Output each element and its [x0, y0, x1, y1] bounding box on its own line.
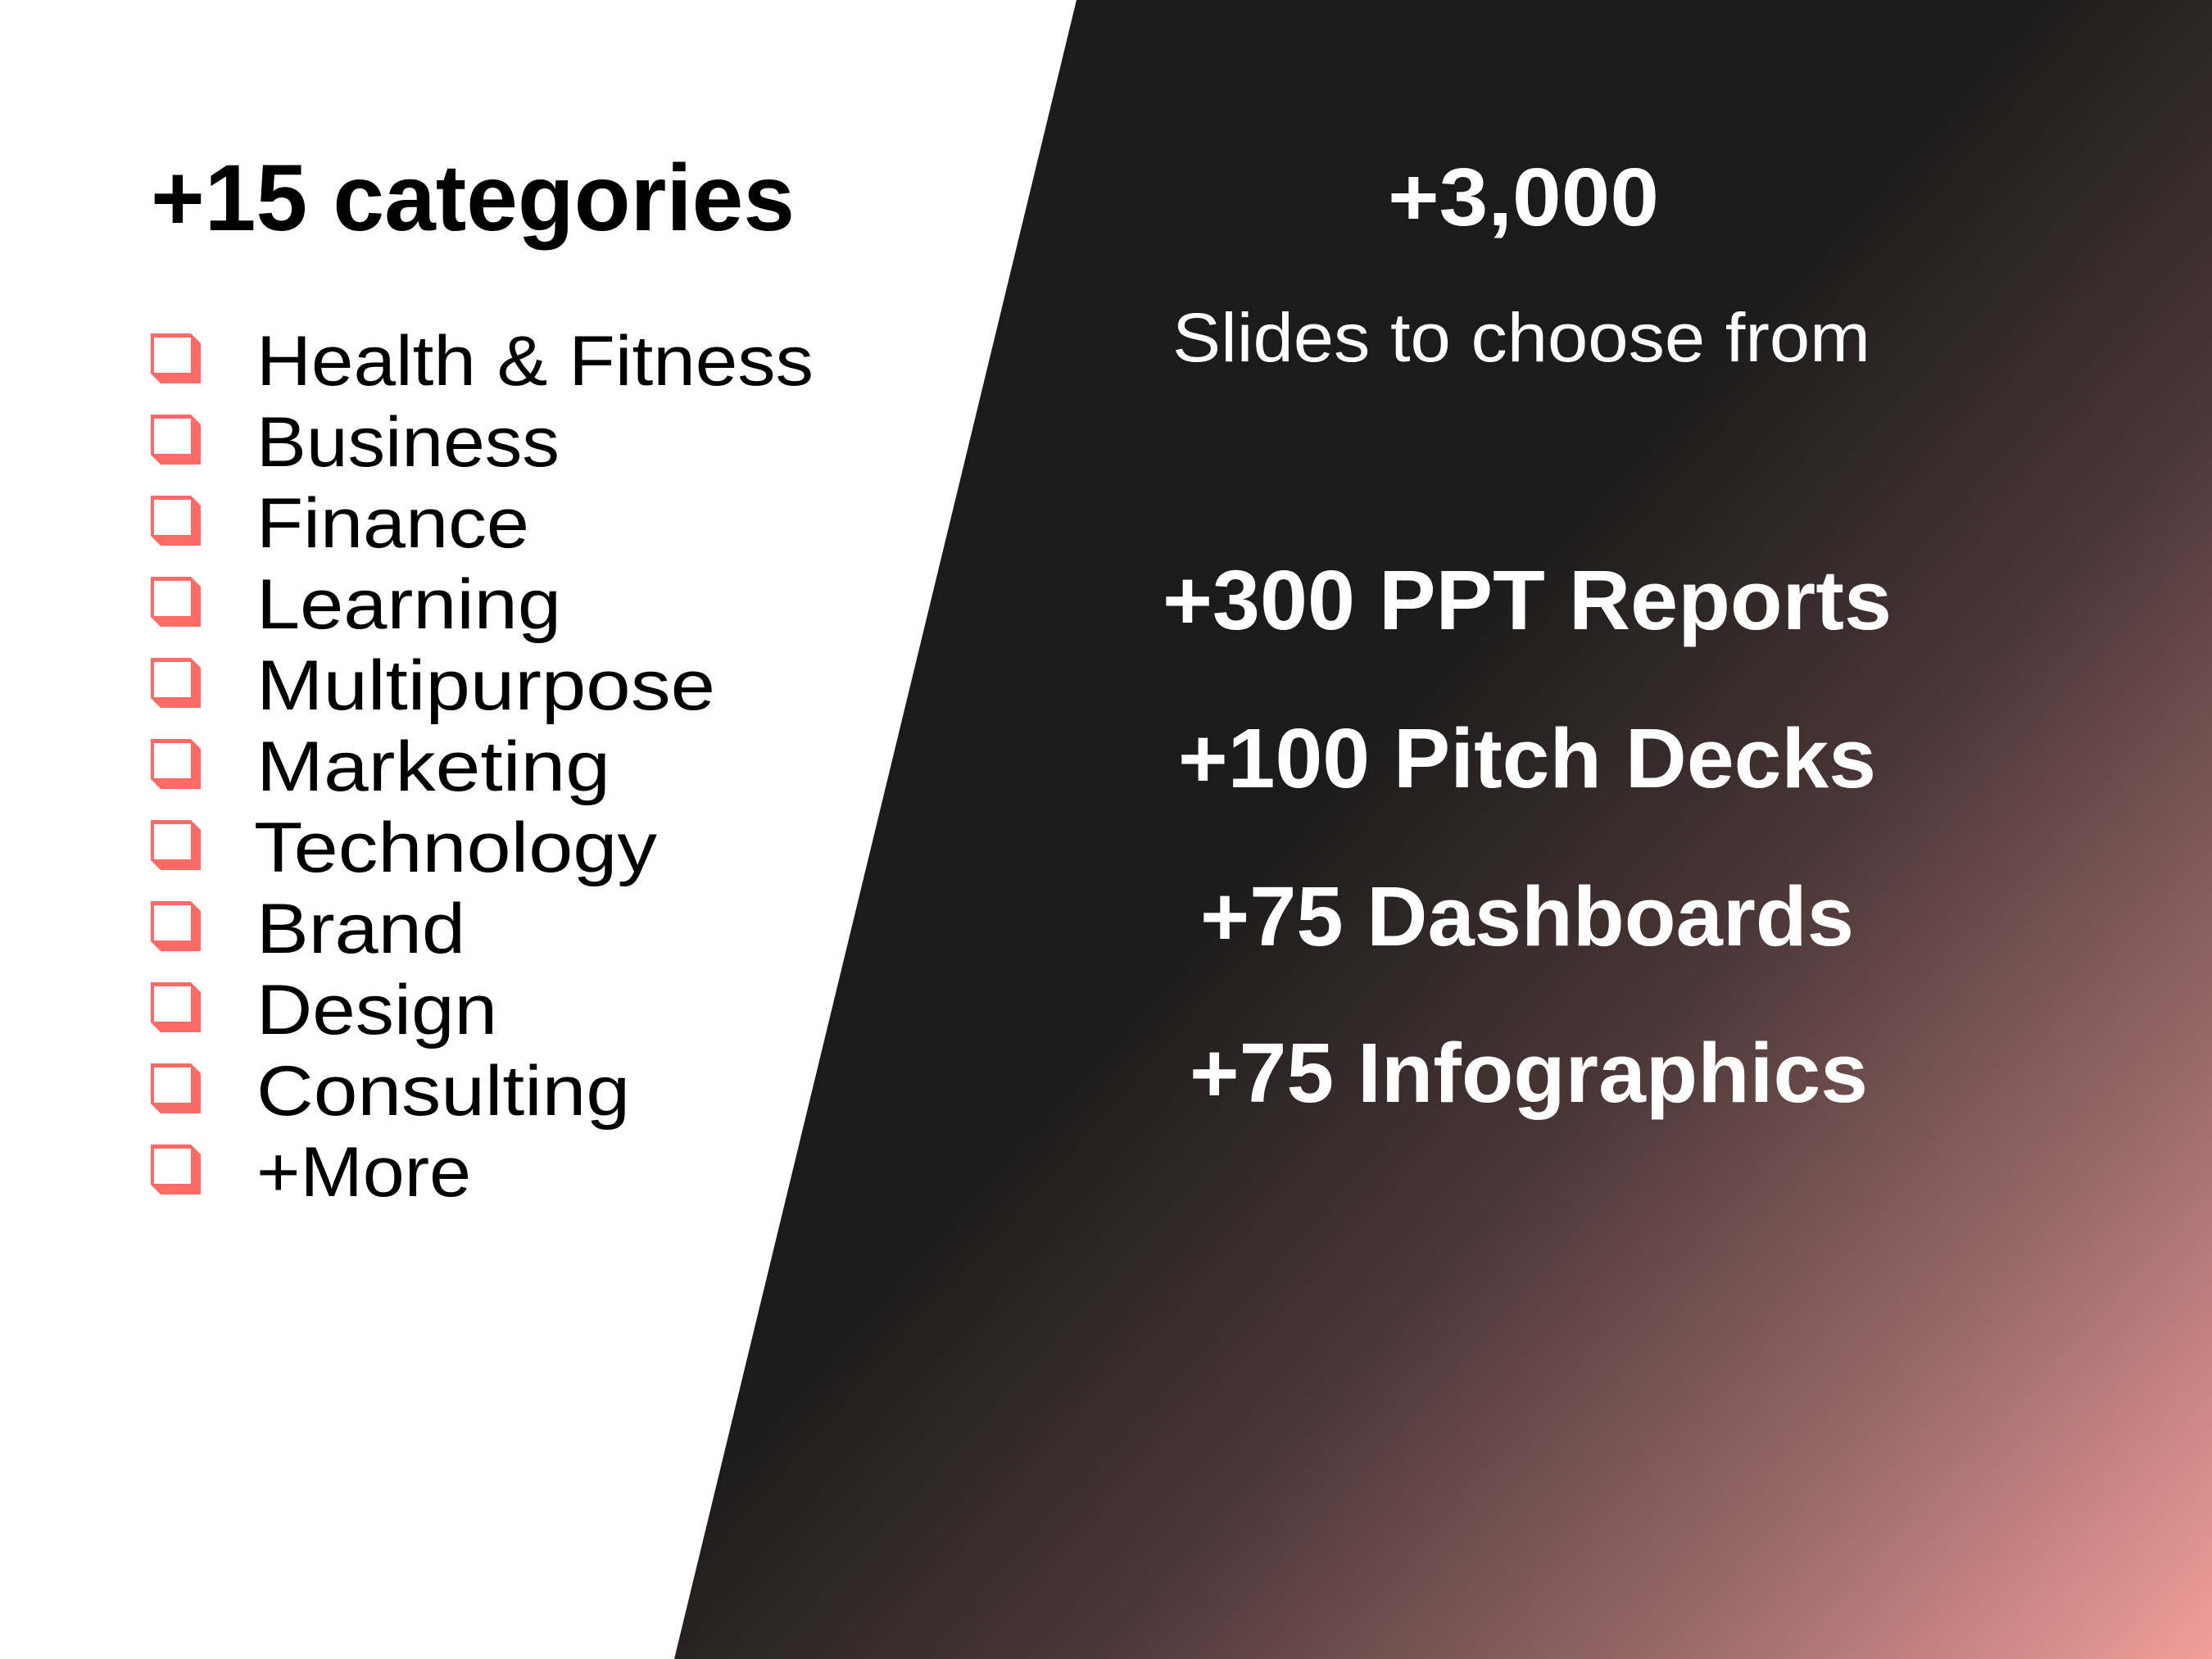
checkbox icons [151, 333, 201, 1194]
category labels: Multipurpose [256, 646, 715, 725]
category labels: Technology [254, 809, 657, 887]
stat: +3,000 slides: +3,000 [1388, 152, 1659, 243]
title: +15 categories: +15 categories [151, 146, 795, 251]
category labels: Finance [256, 484, 529, 563]
category labels: Design [256, 971, 497, 1049]
product counts: +75 Dashboards [1200, 869, 1854, 963]
product counts: +100 Pitch Decks [1178, 711, 1876, 805]
product counts: +300 PPT Reports [1163, 553, 1892, 647]
category labels: Business [256, 403, 560, 482]
product counts [1163, 553, 1892, 1120]
category labels: Health & Fitness [256, 322, 814, 401]
category list [151, 322, 814, 1212]
stat: +3,000 slides: Slides to choose from [1172, 299, 1870, 376]
category labels: Learning [256, 565, 561, 644]
category labels: Brand [256, 890, 465, 968]
stat: +3,000 slides [1172, 152, 1870, 376]
product counts: +75 Infographics [1190, 1026, 1868, 1120]
category labels: +More [256, 1133, 471, 1212]
dark gradient panel [674, 0, 2212, 1659]
category labels: Consulting [256, 1052, 630, 1131]
category labels: Marketing [256, 728, 610, 806]
category labels [254, 322, 814, 1212]
